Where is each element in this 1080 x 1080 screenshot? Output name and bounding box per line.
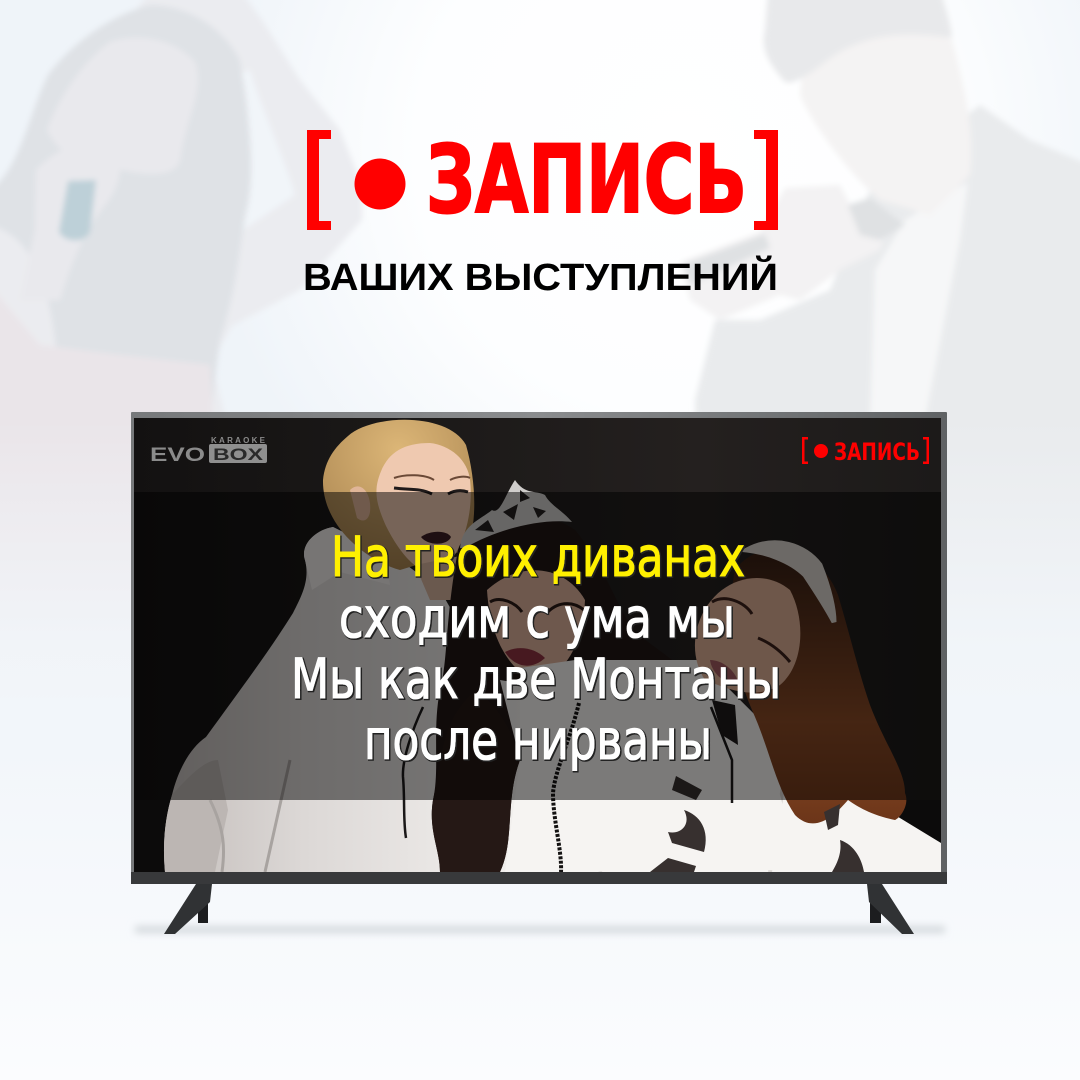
right bracket — [754, 130, 778, 230]
collar — [712, 700, 738, 745]
subtitle: ВАШИХ ВЫСТУПЛЕНИЙ — [303, 254, 778, 299]
lyric line 4: после нирваны — [364, 708, 712, 772]
highlighted lyric line: На твоих диванах — [331, 525, 745, 589]
lyric line 2: сходим с ума мы — [339, 586, 735, 650]
left leg — [164, 884, 212, 934]
logo: Evobox karaoke: EVO — [150, 445, 205, 466]
floral dress — [0, 285, 226, 700]
logo: Evobox karaoke — [150, 436, 267, 466]
logo: Evobox karaoke: BOX — [213, 445, 264, 464]
woman hair — [0, 5, 251, 420]
gap between arm and hair — [240, 70, 295, 232]
lyric line 3: Мы как две Монтаны — [291, 647, 781, 711]
centre jacket panel — [520, 660, 782, 872]
band: jackets — [164, 527, 941, 872]
lower fade — [0, 420, 1080, 740]
faded singer: woman left — [0, 0, 362, 700]
title: recording sign — [307, 126, 778, 235]
centre zip — [553, 703, 579, 872]
man jacket — [695, 105, 1080, 700]
record dot — [354, 158, 406, 210]
tiara — [460, 480, 572, 548]
dark-haired woman — [403, 480, 800, 872]
man hair — [764, 0, 952, 83]
brunette woman with tiara — [695, 543, 906, 823]
tv — [131, 412, 947, 884]
shadow under tv — [135, 926, 945, 933]
tv frame — [131, 412, 947, 884]
jacket lettering — [650, 776, 864, 872]
dark overlay: lyrics band — [134, 492, 941, 800]
heading word: ЗАПИСЬ — [426, 126, 747, 235]
man shirt — [870, 182, 968, 420]
small recording sign: ЗАПИСЬ — [834, 438, 920, 466]
woman face — [47, 38, 198, 174]
man face — [800, 31, 971, 215]
faded singer: man right — [680, 0, 1080, 700]
tv screen photo — [134, 418, 941, 872]
woman arm and body — [0, 0, 362, 700]
right leg — [867, 884, 914, 934]
long hair strand — [432, 761, 520, 872]
right jacket zip — [711, 707, 732, 803]
microphone — [59, 180, 96, 240]
logo: Evobox karaoke: KARAOKE — [211, 436, 266, 445]
blonde woman — [323, 420, 480, 600]
karaoke lyrics — [291, 525, 781, 772]
woman hand — [20, 143, 120, 300]
left jacket seam — [403, 707, 423, 838]
left bracket — [307, 130, 331, 230]
small recording sign — [802, 437, 929, 466]
man hand and mic — [680, 185, 885, 320]
tv stand — [164, 884, 914, 934]
